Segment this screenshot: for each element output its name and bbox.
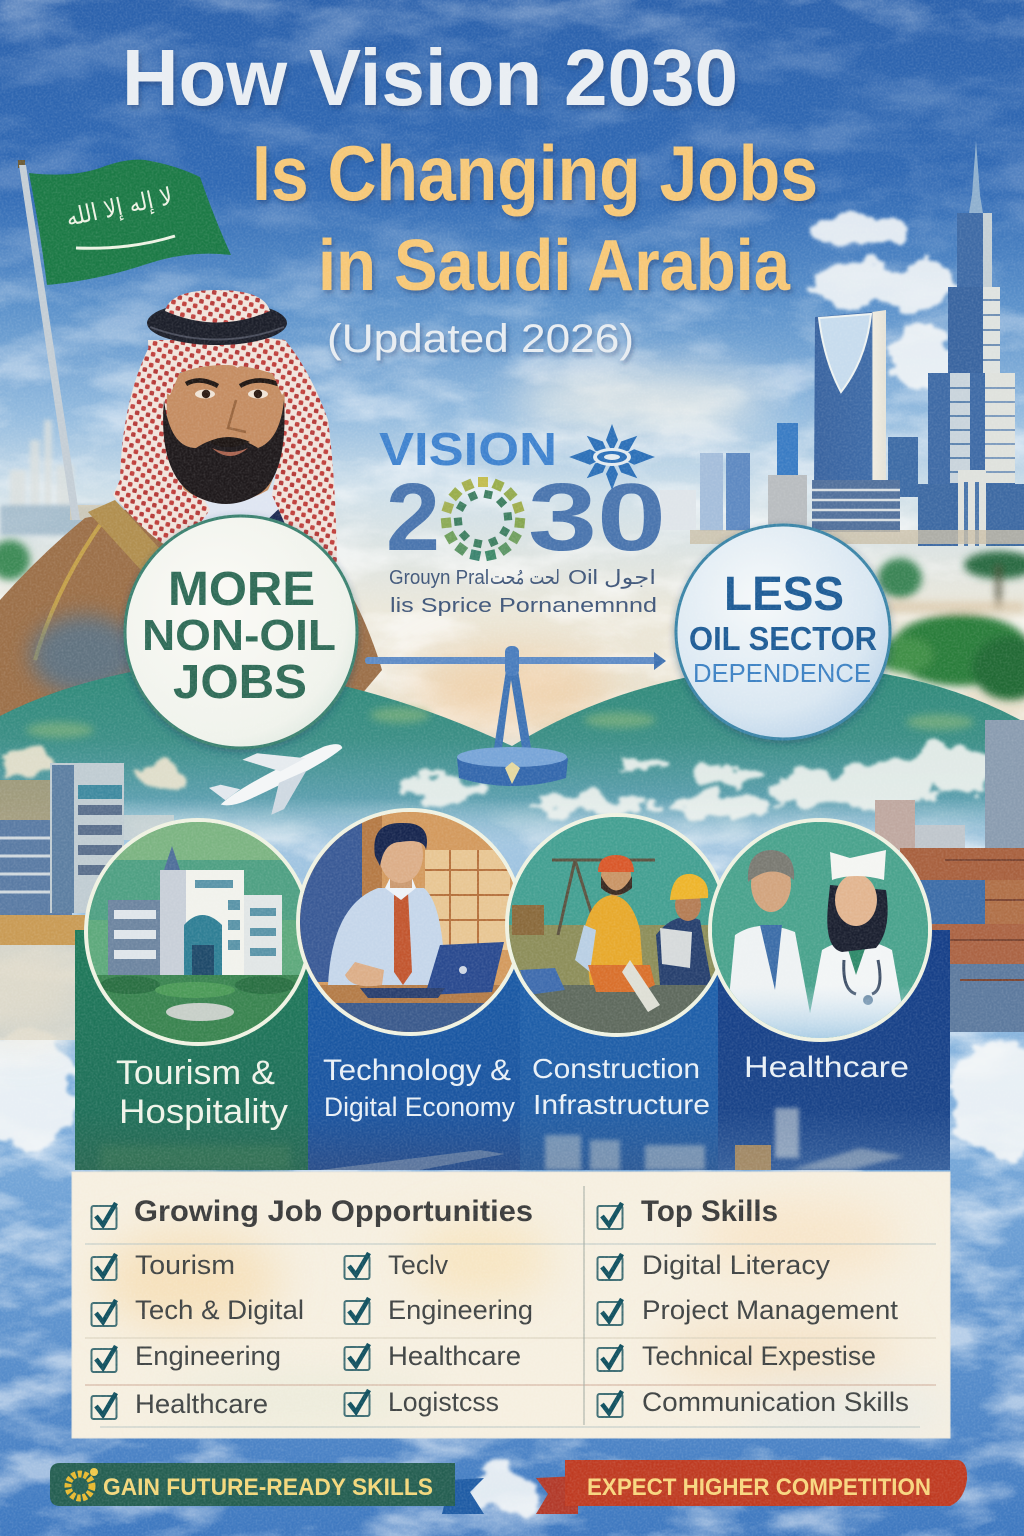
trees on right bbox=[0, 540, 1024, 700]
column: healthcare bbox=[718, 930, 950, 1170]
banner: gain future-ready skills bbox=[50, 1463, 484, 1514]
beard bbox=[163, 400, 285, 504]
banner: expect higher competition bbox=[536, 1460, 967, 1514]
logo: Vision 2030: 2 bbox=[386, 464, 440, 571]
list heading: top skills: Top Skills bbox=[641, 1195, 778, 1228]
column: tourism and hospitality: Tourism & bbox=[116, 1054, 275, 1092]
collar bbox=[190, 490, 292, 545]
right mid-ground buildings and containers bbox=[875, 720, 1024, 1032]
callout: less oil sector dependence: LESS bbox=[724, 568, 844, 621]
eyes and brows bbox=[186, 380, 278, 386]
title: Is Changing Jobs bbox=[252, 129, 818, 217]
callout: less oil sector dependence: DEPENDENCE bbox=[693, 658, 871, 688]
list column: opportunities right bbox=[344, 1250, 533, 1417]
robe bbox=[0, 500, 382, 720]
column: construction and infrastructure bbox=[520, 930, 718, 1170]
portrait: man in ghutra bbox=[0, 290, 382, 720]
icon: airplane bbox=[204, 721, 355, 834]
list column: top skills: Digital Literacy bbox=[642, 1250, 831, 1280]
list column: top skills: Technical Expestise bbox=[642, 1341, 876, 1371]
title: How Vision 2030 bbox=[122, 33, 738, 122]
logo subtitle lines: lis Sprice Pornanemnnd bbox=[390, 595, 657, 617]
image circle: office worker with laptop bbox=[298, 810, 522, 1035]
logo: Vision 2030 bbox=[379, 423, 666, 617]
column: technology and digital economy bbox=[308, 930, 520, 1170]
column: technology and digital economy: Technology & bbox=[323, 1054, 511, 1087]
list column: opportunities right: Engineering bbox=[388, 1295, 533, 1325]
left faint skyline bbox=[0, 420, 130, 535]
title: in Saudi Arabia bbox=[318, 226, 791, 306]
column: tourism and hospitality: Hospitality bbox=[119, 1093, 288, 1131]
list heading: growing job opportunities: Growing Job Opportunities bbox=[134, 1195, 533, 1228]
image circle: hotel bbox=[85, 820, 311, 1045]
list column: top skills bbox=[598, 1250, 909, 1417]
icon: kingdom tower bbox=[812, 310, 900, 532]
title bbox=[122, 33, 818, 361]
list column: opportunities right: Teclv bbox=[388, 1250, 448, 1280]
column: healthcare: Healthcare bbox=[744, 1051, 909, 1084]
ghutra bbox=[113, 336, 337, 570]
column: technology and digital economy: Digital Economy bbox=[324, 1092, 515, 1122]
logo: Vision 2030: VISION bbox=[379, 423, 557, 475]
callout: less oil sector dependence: OIL SECTOR bbox=[689, 620, 877, 657]
logo: Vision 2030: 30 bbox=[528, 464, 666, 571]
list column: top skills: Communication Skills bbox=[642, 1387, 909, 1417]
cloud bank bbox=[1, 744, 992, 817]
balance scale with arrow bbox=[365, 646, 666, 786]
banner: gain future-ready skills: GAIN FUTURE-READY SKILLS bbox=[103, 1474, 433, 1501]
callout: more non-oil jobs: MORE bbox=[168, 563, 315, 616]
list column: opportunities left: Tech & Digital bbox=[135, 1295, 304, 1325]
agal bbox=[147, 290, 287, 345]
icon: green rosette bbox=[441, 477, 525, 561]
callout: more non-oil jobs: JOBS bbox=[173, 656, 307, 709]
image circle: healthcare workers bbox=[710, 820, 930, 1040]
image circle: construction workers bbox=[505, 815, 730, 1035]
face bbox=[167, 365, 285, 502]
left mid-ground buildings bbox=[0, 763, 174, 1040]
logo subtitle lines: Oil bbox=[568, 567, 598, 589]
flag: Saudi Arabia: لا إله إلا الله bbox=[63, 182, 175, 233]
list column: top skills: Project Management bbox=[642, 1295, 899, 1325]
callout: more non-oil jobs bbox=[125, 516, 357, 748]
ghutra front fold bbox=[148, 340, 300, 395]
skyline: Riyadh towers bbox=[660, 140, 1024, 546]
list column: opportunities left: Healthcare bbox=[135, 1389, 268, 1419]
list column: opportunities right: Logistcss bbox=[388, 1387, 499, 1417]
icon: tall tower bbox=[918, 140, 1024, 546]
list column: opportunities left bbox=[92, 1250, 304, 1419]
column: tourism and hospitality bbox=[75, 930, 308, 1170]
logo subtitle lines bbox=[389, 565, 657, 617]
list column: opportunities left: Engineering bbox=[135, 1341, 281, 1371]
panel: job opportunities and skills bbox=[72, 1172, 960, 1438]
banner: expect higher competition: EXPECT HIGHER COMPETITION bbox=[587, 1474, 931, 1501]
logo subtitle lines: Grouyn Pral bbox=[389, 567, 489, 589]
callout: more non-oil jobs: NON-OIL bbox=[142, 611, 336, 660]
title: (Updated 2026) bbox=[327, 317, 634, 361]
hills bbox=[0, 665, 1024, 850]
icon: blue snowflake emblem bbox=[569, 424, 655, 490]
distant buildings bbox=[660, 423, 918, 533]
list column: opportunities left: Tourism bbox=[135, 1250, 235, 1280]
column: construction and infrastructure: Construction bbox=[532, 1053, 700, 1084]
list column: opportunities right: Healthcare bbox=[388, 1341, 521, 1371]
flag: Saudi Arabia bbox=[18, 160, 231, 520]
column: construction and infrastructure: Infrastructure bbox=[533, 1089, 710, 1120]
icon: gold gear bbox=[68, 1468, 98, 1498]
logo subtitle lines: اجول bbox=[604, 565, 656, 589]
callout: less oil sector dependence bbox=[676, 525, 890, 739]
column base skyline bbox=[100, 1108, 905, 1170]
logo subtitle lines: لحت مُحت bbox=[490, 565, 560, 589]
